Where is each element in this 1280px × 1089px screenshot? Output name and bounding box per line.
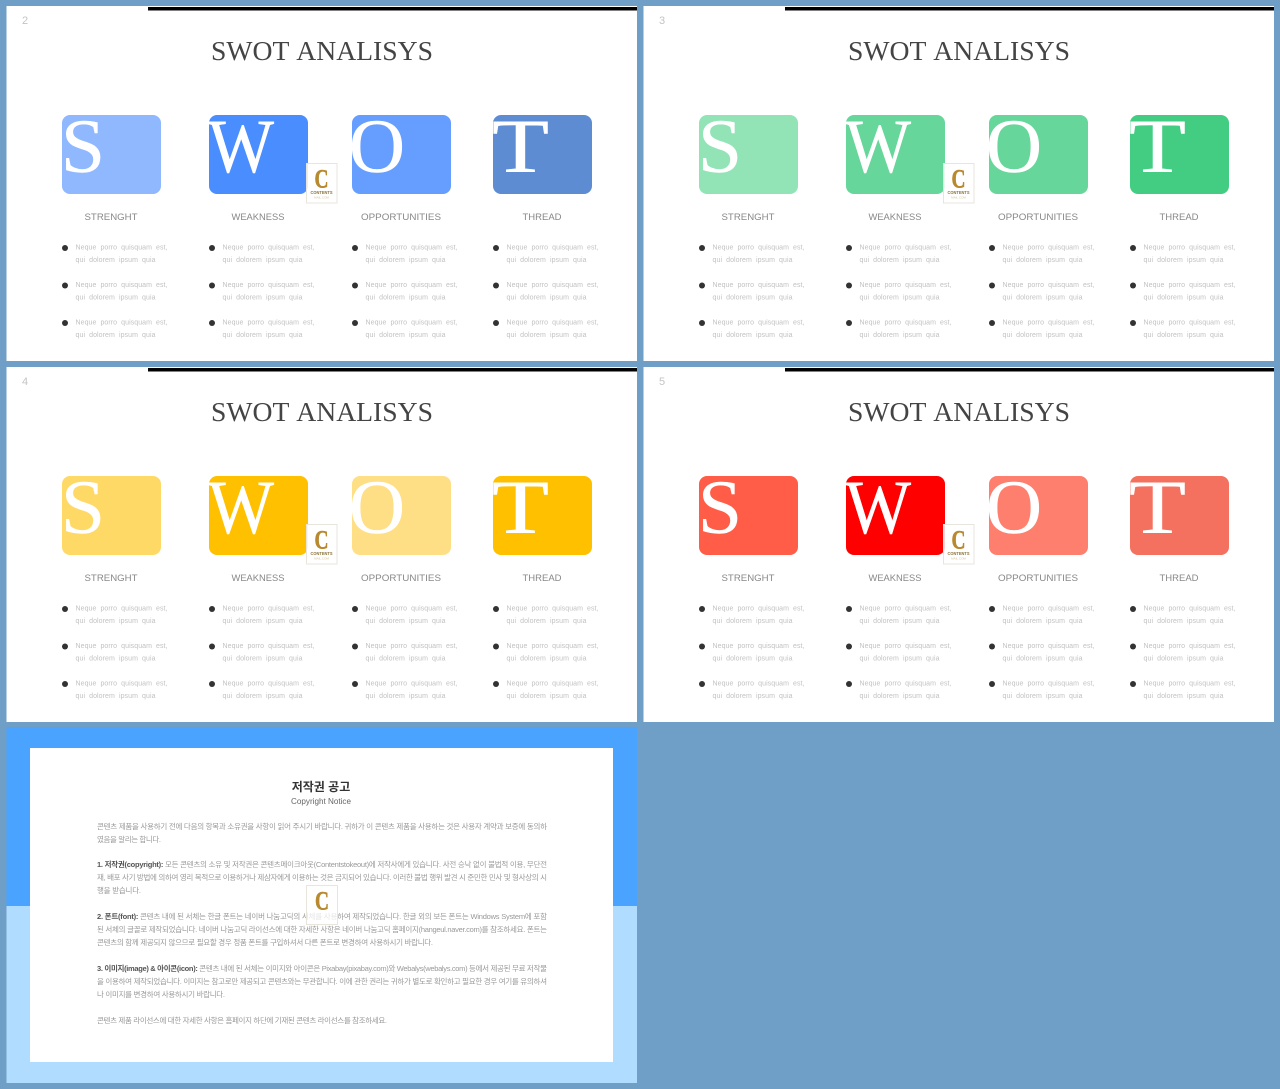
section 3 image and icon: 3. 이미지(image) & 아이콘(icon): 콘텐츠 내에 된 서체는 이미지와 아이콘은 Pixabay(pixabay.com)와 Webalys(webalys.com) 등에서 제공된 무료 저작물 [97, 963, 547, 973]
column: strength: qui dolorem ipsum quia [76, 618, 156, 625]
column: opportunities: Neque porro quisquam est, [1002, 320, 1095, 326]
icon: contents watermark: CONTENTS [948, 551, 970, 556]
column: thread: THREAD [522, 573, 562, 584]
icon: contents watermark [306, 886, 338, 924]
column: thread: qui dolorem ipsum quia [1144, 257, 1224, 264]
column: thread [492, 466, 599, 700]
page number: 2 [22, 15, 28, 27]
page number: 5 [659, 376, 665, 388]
icon: contents watermark [306, 164, 337, 203]
column: strength: STRENGHT [722, 573, 775, 584]
column: weakness: qui dolorem ipsum quia [860, 257, 940, 264]
column: thread: qui dolorem ipsum quia [506, 693, 587, 700]
column: strength: qui dolorem ipsum quia [712, 257, 793, 264]
column: weakness: WEAKNESS [232, 573, 284, 584]
column: thread: Neque porro quisquam est, [1144, 680, 1236, 688]
column: opportunities [349, 105, 458, 339]
column: strength [698, 466, 805, 700]
column: opportunities: OPPORTUNITIES [361, 573, 441, 584]
column: strength: qui dolorem ipsum quia [76, 332, 156, 339]
column: opportunities: Neque porro quisquam est, [366, 643, 458, 650]
column: opportunities: Neque porro quisquam est, [366, 680, 458, 688]
column: thread: qui dolorem ipsum quia [506, 257, 587, 264]
section 3 image and icon: 을 이용하여 제작되었습니다. 이미지는 참고로만 제공되고 콘텐츠와는 무관합니다. 이에 관한 권리는 귀하가 별도로 확인하고 필요한 경우 여기를 유의하셔 [97, 976, 547, 986]
column: strength: qui dolorem ipsum quia [712, 656, 793, 662]
column: opportunities: qui dolorem ipsum quia [1002, 693, 1083, 700]
notice heading: 저작권 공고 [292, 779, 350, 794]
column: strength: S [698, 105, 742, 189]
column: weakness: W [845, 105, 911, 189]
column: opportunities: O [349, 466, 405, 550]
section 2 font: 2. 폰트(font): 콘텐츠 내에 된 서체는 한글 폰트는 네이버 나눔고딕의 서체를 사용하여 제작되었습니다. 한글 외의 보든 폰트는 Windows System에 포함 [97, 911, 547, 921]
icon: contents watermark: CONTENTS [948, 190, 970, 195]
column: opportunities: qui dolorem ipsum quia [366, 332, 446, 339]
column: strength: Neque porro quisquam est, [712, 606, 805, 612]
column: strength: qui dolorem ipsum quia [76, 294, 156, 302]
column: weakness: qui dolorem ipsum quia [860, 332, 940, 339]
section 3 image and icon [97, 963, 547, 999]
section 2 font [97, 911, 547, 947]
icon: contents watermark: CONTENTS [310, 551, 332, 556]
column: opportunities: Neque porro quisquam est, [366, 282, 458, 289]
column: opportunities: OPPORTUNITIES [361, 212, 441, 223]
icon: contents watermark: MAIL.COM [314, 196, 329, 200]
column: thread: qui dolorem ipsum quia [506, 656, 587, 662]
column: thread: qui dolorem ipsum quia [1144, 332, 1224, 339]
section 1 copyright: 1. 저작권(copyright): 모든 콘텐츠의 소유 및 저작권은 콘텐츠메이크아웃(Contentstokeout)에 저작사에게 있습니다. 사전 승낙 없이 불법적 이용, 무단전 [97, 859, 547, 869]
column: opportunities: qui dolorem ipsum quia [366, 656, 446, 662]
column: thread: Neque porro quisquam est, [506, 282, 599, 289]
column: opportunities: qui dolorem ipsum quia [1002, 618, 1083, 625]
column: weakness: Neque porro quisquam est, [860, 606, 952, 612]
column: thread: qui dolorem ipsum quia [506, 618, 587, 625]
column: strength: qui dolorem ipsum quia [76, 656, 156, 662]
column: strength: qui dolorem ipsum quia [712, 332, 793, 339]
column: strength: STRENGHT [84, 212, 138, 223]
column: thread: qui dolorem ipsum quia [1144, 294, 1224, 302]
column: weakness: Neque porro quisquam est, [860, 680, 952, 688]
column: opportunities: OPPORTUNITIES [998, 212, 1078, 223]
column: thread: T [492, 466, 549, 550]
icon: contents watermark: CONTENTS [310, 190, 332, 195]
column: weakness: Neque porro quisquam est, [222, 643, 315, 650]
section 1 copyright: 재, 배포 사기 방법에 의하여 영리 목적으로 이용하거나 제삼자에게 이용하는 것은 금지되어 있습니다. 이러한 불법 행위 발견 시 준민한 민사 및 형사상의 시 [97, 872, 547, 882]
column: strength: Neque porro quisquam est, [76, 282, 168, 289]
column: weakness: W [208, 466, 274, 550]
column: weakness: qui dolorem ipsum quia [222, 693, 303, 700]
column: thread: Neque porro quisquam est, [506, 680, 599, 688]
column: thread: Neque porro quisquam est, [1144, 282, 1236, 289]
column: thread: Neque porro quisquam est, [506, 320, 599, 326]
panel: copyright notice [6, 727, 637, 1083]
icon: contents watermark: C [314, 164, 328, 194]
column: weakness: qui dolorem ipsum quia [860, 693, 940, 700]
column: weakness: Neque porro quisquam est, [222, 606, 315, 612]
column: strength: STRENGHT [722, 212, 775, 223]
section 1 copyright: 행을 받습니다. [97, 885, 141, 895]
panel: slide 3 green SWOT [644, 6, 1274, 361]
icon: contents watermark: MAIL.COM [951, 196, 966, 200]
column: strength: Neque porro quisquam est, [76, 680, 168, 688]
icon: contents watermark: MAIL.COM [951, 556, 966, 560]
column: thread: qui dolorem ipsum quia [506, 332, 587, 339]
column: strength: S [61, 466, 105, 550]
column: strength: qui dolorem ipsum quia [76, 693, 156, 700]
column: opportunities: qui dolorem ipsum quia [366, 618, 446, 625]
column: weakness: Neque porro quisquam est, [860, 244, 952, 252]
column: opportunities [349, 466, 458, 700]
column: weakness: WEAKNESS [232, 212, 284, 223]
column: thread [1129, 105, 1236, 339]
column: thread [1129, 466, 1236, 700]
column: opportunities: Neque porro quisquam est, [366, 244, 458, 252]
column: strength: Neque porro quisquam est, [76, 320, 168, 326]
column: strength: Neque porro quisquam est, [712, 244, 805, 252]
column: thread: THREAD [1160, 212, 1199, 223]
section 2 font: 콘텐츠의 함께 제공되지 않으므로 필요할 경우 정품 폰트를 구입하셔서 다른 폰트로 변경하여 사용하시기 바랍니다. [97, 937, 433, 947]
column: thread: Neque porro quisquam est, [1144, 643, 1236, 650]
icon: contents watermark [944, 164, 974, 203]
column: strength: Neque porro quisquam est, [712, 282, 805, 289]
section 1 copyright [97, 859, 547, 895]
column: opportunities: Neque porro quisquam est, [1002, 643, 1095, 650]
column: opportunities: O [349, 105, 405, 189]
column: strength [61, 466, 168, 700]
column: weakness [845, 466, 952, 700]
column: thread: Neque porro quisquam est, [1144, 244, 1236, 252]
column: strength: Neque porro quisquam est, [76, 643, 168, 650]
column: weakness: W [208, 105, 274, 189]
section 3 image and icon: 나 이미지를 변경하여 사용하시기 바랍니다. [97, 989, 225, 999]
title: SWOT ANALISYS [848, 397, 1070, 427]
column: opportunities: OPPORTUNITIES [998, 573, 1078, 584]
column: strength: qui dolorem ipsum quia [712, 618, 793, 625]
column: strength: qui dolorem ipsum quia [712, 693, 793, 700]
column: opportunities: O [986, 466, 1042, 550]
column: strength: qui dolorem ipsum quia [76, 257, 156, 264]
column: opportunities: qui dolorem ipsum quia [366, 257, 446, 264]
icon: contents watermark [944, 524, 974, 564]
column: weakness: Neque porro quisquam est, [222, 320, 315, 326]
column: weakness: qui dolorem ipsum quia [222, 332, 303, 339]
column: weakness: qui dolorem ipsum quia [222, 656, 303, 662]
icon: contents watermark: MAIL.COM [314, 556, 329, 560]
column: strength: Neque porro quisquam est, [712, 680, 805, 688]
column: weakness: Neque porro quisquam est, [222, 244, 315, 252]
column: thread: T [1129, 466, 1186, 550]
notice subheading: Copyright Notice [291, 797, 351, 806]
icon: contents watermark: C [952, 526, 966, 554]
icon: contents watermark [306, 524, 337, 564]
column: weakness: Neque porro quisquam est, [222, 680, 315, 688]
column: strength: S [698, 466, 742, 550]
column: opportunities: O [986, 105, 1042, 189]
column: weakness: qui dolorem ipsum quia [222, 294, 303, 302]
column: strength: Neque porro quisquam est, [76, 606, 168, 612]
column: strength: S [61, 105, 105, 189]
column: opportunities: Neque porro quisquam est, [1002, 244, 1095, 252]
panel: slide 2 blue SWOT [6, 6, 637, 361]
column: weakness: qui dolorem ipsum quia [222, 618, 303, 625]
column: weakness [208, 466, 315, 700]
column: strength: Neque porro quisquam est, [76, 244, 168, 252]
panel: slide 4 yellow SWOT [6, 367, 637, 722]
page number: 4 [22, 376, 28, 388]
column: thread: T [492, 105, 549, 189]
column: weakness: Neque porro quisquam est, [860, 282, 952, 289]
column: weakness [208, 105, 315, 339]
title: SWOT ANALISYS [211, 397, 433, 427]
closing line: 콘텐츠 제품 라이선스에 대한 자세한 사항은 홈페이지 하단에 기재된 콘텐츠 라이선스를 참조하세요. [97, 1015, 387, 1025]
icon: contents watermark: C [315, 886, 329, 916]
column: opportunities: qui dolorem ipsum quia [366, 294, 446, 302]
column: strength: qui dolorem ipsum quia [712, 294, 793, 302]
column: thread: Neque porro quisquam est, [1144, 320, 1236, 326]
page number: 3 [659, 15, 665, 27]
column: weakness: qui dolorem ipsum quia [860, 618, 940, 625]
column: thread: qui dolorem ipsum quia [1144, 618, 1224, 625]
intro paragraph [97, 821, 547, 844]
column: weakness: WEAKNESS [868, 212, 922, 223]
column: weakness: qui dolorem ipsum quia [860, 656, 940, 662]
column: weakness: W [845, 466, 911, 550]
column: opportunities: Neque porro quisquam est, [366, 320, 458, 326]
column: opportunities: qui dolorem ipsum quia [1002, 332, 1083, 339]
intro paragraph: 콘텐츠 제품을 사용하기 전에 다음의 항목과 소유권을 사항이 읽어 주시기 바랍니다. 귀하가 이 콘텐츠 제품을 사용하는 것은 사용자 계약과 보증에 동의하 [97, 821, 547, 831]
column: weakness: Neque porro quisquam est, [860, 320, 952, 326]
column: strength [61, 105, 168, 339]
title: SWOT ANALISYS [211, 36, 433, 66]
panel: slide 5 red SWOT [644, 367, 1274, 722]
column: thread: Neque porro quisquam est, [506, 606, 599, 612]
column: thread: Neque porro quisquam est, [506, 643, 599, 650]
column: strength: Neque porro quisquam est, [712, 320, 805, 326]
column: opportunities: qui dolorem ipsum quia [366, 693, 446, 700]
column: thread: Neque porro quisquam est, [1144, 606, 1236, 612]
column: opportunities [986, 105, 1095, 339]
column: weakness [845, 105, 952, 339]
column: opportunities: qui dolorem ipsum quia [1002, 656, 1083, 662]
column: weakness: WEAKNESS [868, 573, 922, 584]
column: thread: THREAD [522, 212, 562, 223]
column: weakness: Neque porro quisquam est, [222, 282, 315, 289]
column: thread: qui dolorem ipsum quia [1144, 693, 1224, 700]
column: thread: Neque porro quisquam est, [506, 244, 599, 252]
column: opportunities: Neque porro quisquam est, [1002, 282, 1095, 289]
column: opportunities: Neque porro quisquam est, [366, 606, 458, 612]
column: strength: Neque porro quisquam est, [712, 643, 805, 650]
column: thread: qui dolorem ipsum quia [1144, 656, 1224, 662]
intro paragraph: 였음을 알리는 합니다. [97, 834, 161, 844]
column: thread: THREAD [1160, 573, 1199, 584]
column: opportunities: Neque porro quisquam est, [1002, 680, 1095, 688]
column: opportunities: qui dolorem ipsum quia [1002, 257, 1083, 264]
column: thread: qui dolorem ipsum quia [506, 294, 587, 302]
column: weakness: Neque porro quisquam est, [860, 643, 952, 650]
column: thread: T [1129, 105, 1186, 189]
column: opportunities: Neque porro quisquam est, [1002, 606, 1095, 612]
column: thread [492, 105, 599, 339]
column: strength [698, 105, 805, 339]
icon: contents watermark: C [952, 164, 966, 194]
column: strength: STRENGHT [84, 573, 138, 584]
title: SWOT ANALISYS [848, 36, 1070, 66]
icon: contents watermark: C [314, 526, 328, 554]
section 2 font: 된 서체의 글꼴로 제작되었습니다. 네이버 나눔고딕 라이선스에 대한 자세한 사항은 네이버 나눔고딕 홈페이지(hangeul.naver.com)를 참조하세요. 폰트는 [97, 924, 547, 934]
column: opportunities [986, 466, 1095, 700]
column: opportunities: qui dolorem ipsum quia [1002, 294, 1083, 302]
column: weakness: qui dolorem ipsum quia [222, 257, 303, 264]
column: weakness: qui dolorem ipsum quia [860, 294, 940, 302]
